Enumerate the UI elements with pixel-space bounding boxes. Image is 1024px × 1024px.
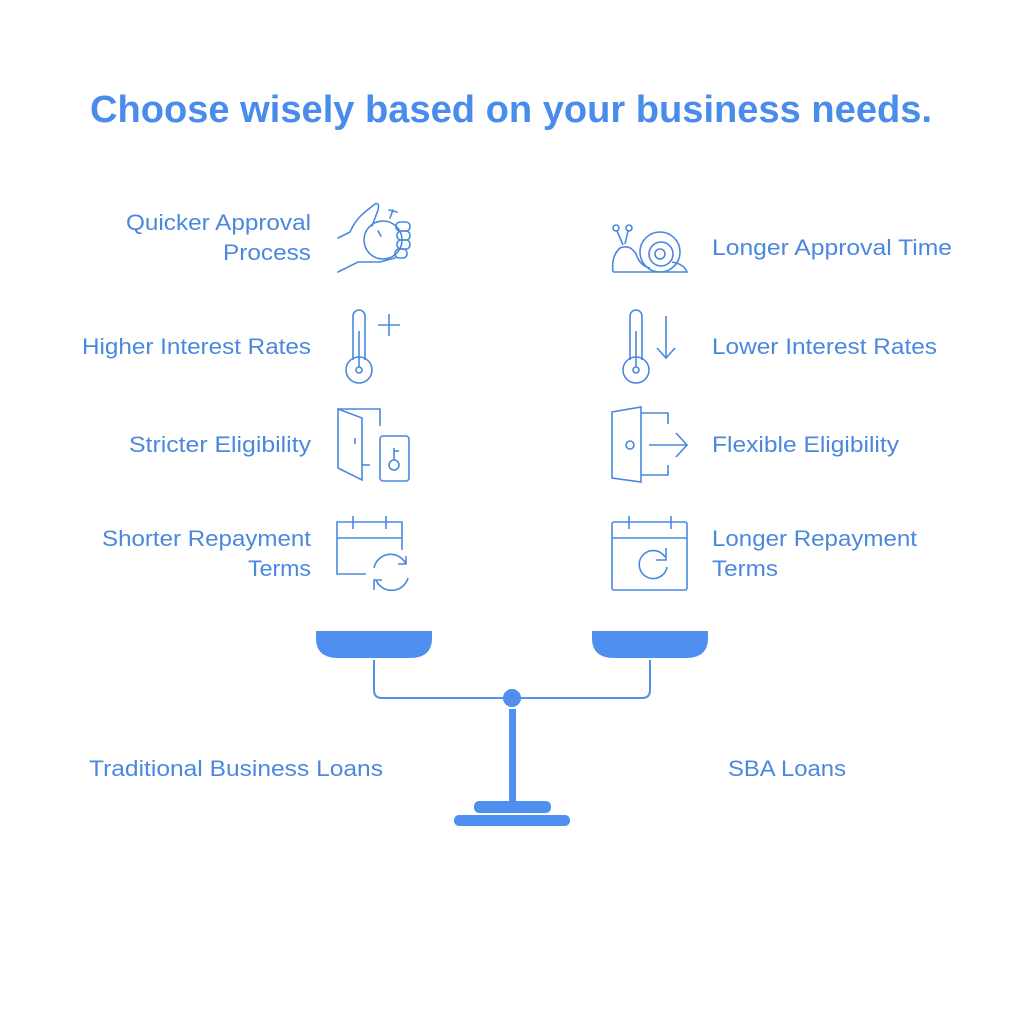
icon: thermometer down [623,310,675,383]
icon: snail [613,225,687,272]
icon: thermometer plus [346,310,400,383]
label: SBA: SBA Loans [728,756,846,781]
icon: open door arrow [612,407,687,482]
right labels: Longer Approval Time [712,235,952,260]
left labels: Quicker Approval [126,210,311,235]
balance scale [316,631,708,826]
left labels: Stricter Eligibility [129,432,311,457]
right labels: Terms [712,556,778,581]
left labels: Shorter Repayment [102,526,311,551]
right labels: Longer Repayment [712,526,917,551]
icon: calendar with cycle [337,516,408,590]
title: Choose wisely based on your business needs. [90,89,932,131]
icon: calendar with refresh [612,516,687,590]
left labels [82,210,311,581]
right labels: Lower Interest Rates [712,334,937,359]
left labels: Terms [248,556,311,581]
icon: stopwatch in hand [338,204,410,272]
icon: door with key [338,409,409,481]
left labels: Higher Interest Rates [82,334,311,359]
left labels: Process [223,240,311,265]
right labels [712,235,952,581]
label: traditional: Traditional Business Loans [89,756,383,781]
right labels: Flexible Eligibility [712,432,899,457]
